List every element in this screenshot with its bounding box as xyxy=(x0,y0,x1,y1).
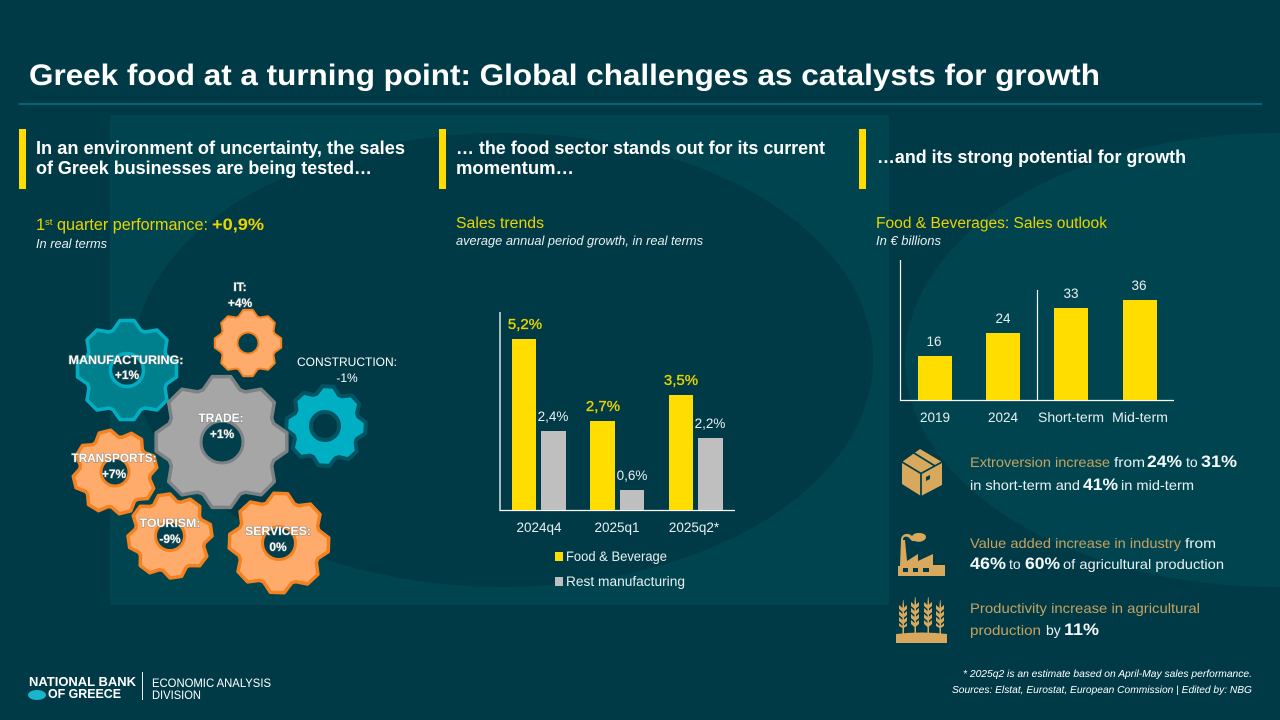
label: services: SERVICES: xyxy=(245,524,311,538)
heading accent bar left xyxy=(19,129,26,189)
heading middle: … the food sector stands out for its current xyxy=(456,138,825,158)
footnote and sources: * 2025q2 is an estimate based on April-May sales performance. xyxy=(963,668,1252,680)
subtitle: sales trends: Sales trends xyxy=(456,215,544,232)
text: extroversion: 31% xyxy=(1201,452,1237,471)
subtitle: first quarter performance xyxy=(36,215,264,234)
icon: wheat xyxy=(896,597,947,643)
gear: transports xyxy=(65,422,165,522)
logo: National Bank of Greece: NATIONAL BANK xyxy=(29,675,136,689)
text: extroversion: in mid-term xyxy=(1121,477,1194,493)
heading accent bar middle xyxy=(439,129,446,189)
outlook values: 36 xyxy=(1131,278,1147,293)
text: extroversion: 41% xyxy=(1083,475,1118,494)
logo: National Bank of Greece: OF GREECE xyxy=(48,687,121,701)
label: tourism xyxy=(140,516,200,546)
category labels: 2024q4 xyxy=(516,520,562,535)
bar values: 2,2% xyxy=(695,416,725,431)
heading accent bar right xyxy=(859,129,866,189)
text: productivity: by xyxy=(1046,622,1061,638)
logo: National Bank of Greece: DIVISION xyxy=(152,690,201,702)
text: value added: 46% xyxy=(970,554,1006,573)
category labels: 2025q2* xyxy=(669,520,720,535)
label: IT: IT: xyxy=(233,280,247,294)
text: value added: from xyxy=(1185,535,1216,551)
outlook categories: 2024 xyxy=(988,410,1019,425)
panel: growth potential xyxy=(859,129,1237,643)
text: value added: of agricultural production xyxy=(1063,556,1224,572)
bar chart: sales outlook xyxy=(900,260,1174,425)
gear: trade xyxy=(156,377,287,507)
label: services xyxy=(245,524,311,554)
bar values: 0,6% xyxy=(617,468,647,483)
outlook categories: 2019 xyxy=(920,410,950,425)
bar values: 2,7% xyxy=(586,398,620,415)
label: manufacturing: +1% xyxy=(115,368,140,382)
bar values: 5,2% xyxy=(508,316,542,333)
text: extroversion: to xyxy=(1186,454,1198,470)
label: construction: -1% xyxy=(336,371,358,385)
subtitle: first quarter performance: quarter performance: xyxy=(57,216,208,234)
bars 2024q4 xyxy=(512,339,566,510)
heading left: of Greek businesses are being tested… xyxy=(36,158,372,178)
bars 2025q2 xyxy=(669,395,723,510)
gear: tourism xyxy=(123,489,217,583)
outlook values: 33 xyxy=(1063,286,1079,301)
label: tourism: -9% xyxy=(159,532,181,546)
panel: sales of Greek businesses xyxy=(19,129,405,594)
text: extroversion: Extroversion increase xyxy=(970,454,1110,470)
label: trade: +1% xyxy=(210,427,235,441)
title rule xyxy=(19,103,1262,105)
bar chart: sales trends xyxy=(500,312,735,535)
outlook values: 16 xyxy=(926,334,942,349)
heading middle: momentum… xyxy=(456,158,574,178)
icon: factory xyxy=(898,533,945,576)
label: construction xyxy=(297,355,397,385)
logo: National Bank of Greece: ECONOMIC ANALYSIS xyxy=(152,678,271,690)
label: transports xyxy=(72,451,156,481)
gear: construction xyxy=(284,384,368,468)
footnote and sources xyxy=(952,668,1252,696)
label: manufacturing xyxy=(68,353,184,382)
bar values xyxy=(508,316,725,483)
label: trade: TRADE: xyxy=(198,411,244,425)
heading left xyxy=(36,138,405,178)
text: extroversion: 24% xyxy=(1147,452,1182,471)
icon: box xyxy=(902,449,942,496)
outlook categories: Mid-term xyxy=(1112,410,1168,425)
outlook categories: Short-term xyxy=(1038,410,1104,425)
note: in real terms: In real terms xyxy=(36,237,107,251)
category labels xyxy=(516,520,720,535)
subtitle: first quarter performance: +0,9% xyxy=(212,215,264,234)
bars 2025q1 xyxy=(590,421,644,510)
bar values: 3,5% xyxy=(664,372,698,389)
footnote and sources: Sources: Elstat, Eurostat, European Commission | Edited by: NBG xyxy=(952,684,1252,696)
gear: services xyxy=(228,492,330,594)
logo mark xyxy=(28,690,46,700)
outlook values: 24 xyxy=(995,311,1011,326)
text: value added: 60% xyxy=(1025,554,1060,573)
label: transports: +7% xyxy=(102,467,127,481)
logo: National Bank of Greece xyxy=(28,672,271,702)
label: IT xyxy=(228,280,253,310)
panel: food sector momentum xyxy=(439,129,825,589)
outlook bars xyxy=(918,300,1157,400)
note: in euro billions: In € billions xyxy=(876,234,941,248)
text: extroversion xyxy=(970,452,1237,494)
label: services: 0% xyxy=(269,540,287,554)
outlook values xyxy=(926,278,1147,349)
text: productivity: Productivity increase in agricultural xyxy=(970,600,1200,616)
outlook categories xyxy=(920,410,1168,425)
label: IT: +4% xyxy=(228,296,253,310)
label: trade xyxy=(198,411,244,441)
legend: Rest manufacturing xyxy=(566,574,685,589)
label: transports: TRANSPORTS: xyxy=(72,451,156,465)
label: manufacturing: MANUFACTURING: xyxy=(68,353,184,367)
text: value added xyxy=(970,535,1224,573)
subtitle: first quarter performance: 1 xyxy=(36,216,45,234)
text: value added: to xyxy=(1009,556,1021,572)
text: extroversion: from xyxy=(1114,454,1145,470)
subtitle: sales outlook: Food & Beverages: Sales outlook xyxy=(876,215,1107,232)
subtitle: first quarter performance: st xyxy=(45,217,53,228)
heading left: In an environment of uncertainty, the sales xyxy=(36,138,405,158)
gear: manufacturing xyxy=(78,320,176,420)
label: tourism: TOURISM: xyxy=(140,516,200,530)
label: construction: CONSTRUCTION: xyxy=(297,355,397,369)
bar values: 2,4% xyxy=(538,409,568,424)
text: extroversion: in short-term and xyxy=(970,477,1080,493)
heading middle xyxy=(456,138,825,178)
note: average annual growth: average annual period growth, in real terms xyxy=(456,234,703,248)
heading right: …and its strong potential for growth xyxy=(877,147,1186,167)
legend xyxy=(555,549,685,589)
text: productivity: 11% xyxy=(1064,620,1099,639)
category labels: 2025q1 xyxy=(594,520,640,535)
text: productivity xyxy=(970,600,1200,639)
title: Greek food at a turning point: Global challenges as catalysts for growth xyxy=(29,59,1100,92)
text: value added: Value added increase in industry xyxy=(970,535,1181,551)
gear: IT xyxy=(215,310,281,376)
text: productivity: production xyxy=(970,622,1041,638)
legend: Food & Beverage xyxy=(566,549,667,564)
